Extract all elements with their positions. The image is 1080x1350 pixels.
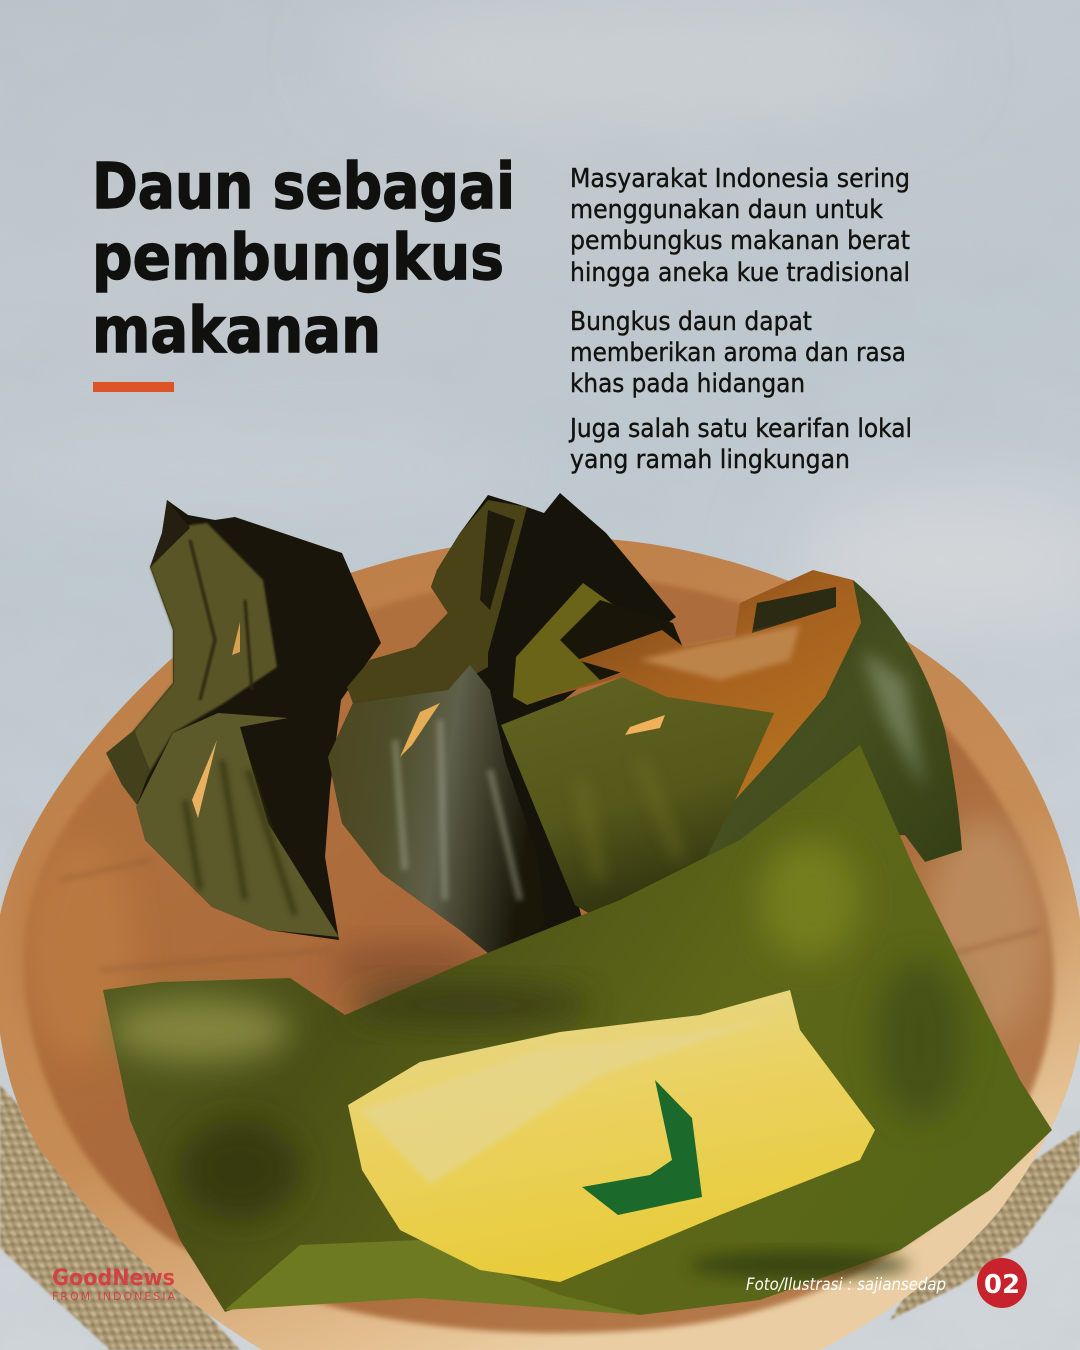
wooden plate [0,537,1080,1350]
text block: paragraph 1 [570,164,910,288]
text block: paragraph 2: Bungkus daun dapat [570,307,812,337]
burlap mat [0,1085,1080,1350]
title: pembungkus [92,221,504,294]
page number badge: 02 [984,1270,1020,1300]
text block: paragraph 2: khas pada hidangan [570,369,805,399]
text block: paragraph 3 [568,414,912,475]
text block: paragraph 2: memberikan aroma dan rasa [570,338,906,368]
logo: GoodNews from Indonesia: GoodNews [52,1266,175,1291]
title [92,150,515,367]
bamboo pin [192,740,217,818]
logo: GoodNews from Indonesia [52,1266,175,1303]
text block: paragraph 2 [570,307,906,399]
text block: paragraph 1: pembungkus makanan berat [570,226,910,256]
page number badge [977,1258,1027,1308]
front right leaf packet with browned top [501,570,861,920]
lower wrapped leaf [136,713,339,937]
orange accent bar [93,382,174,392]
text block: paragraph 3: Juga salah satu kearifan lokal [568,414,912,444]
title: Daun sebagai [92,150,515,223]
text block: paragraph 1: menggunakan daun untuk [570,195,883,225]
lower wrapped leaf [328,665,545,957]
text block: paragraph 3: yang ramah lingkungan [570,445,850,475]
middle leaf packet [328,493,676,957]
foreground open banana leaf [103,745,1052,1315]
photo credit: Foto/Ilustrasi : sajiansedap [746,1275,946,1295]
title: makanan [92,294,381,367]
back right leaf packet [680,580,962,880]
logo: GoodNews from Indonesia: FROM INDONESIA [52,1290,175,1303]
icon: pandan leaf garnish [582,1080,702,1215]
left leaf packet [106,500,381,940]
inner plate bowl [24,575,1054,1333]
yellow steamed cake [348,990,875,1282]
green wrapped leaf [501,677,774,920]
text block: paragraph 1: hingga aneka kue tradisional [570,258,910,288]
text block: paragraph 1: Masyarakat Indonesia sering [570,164,910,194]
